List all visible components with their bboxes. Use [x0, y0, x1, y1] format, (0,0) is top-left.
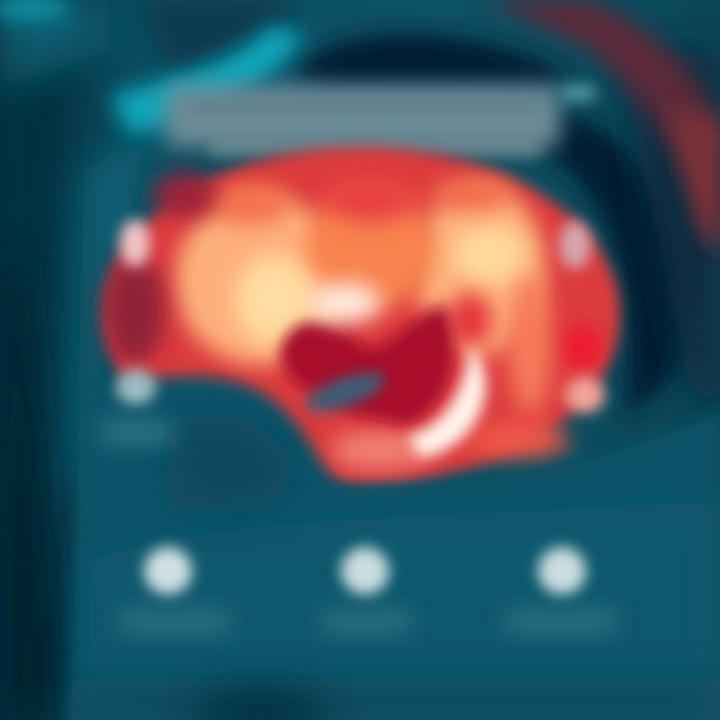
cyan streak — [0, 0, 305, 135]
central crimson heart shape — [280, 283, 486, 458]
marker: upper left item — [100, 369, 172, 444]
top right maroon swirl — [485, 0, 720, 270]
top right dark arch — [295, 34, 720, 420]
marker: bottom item three — [505, 547, 617, 632]
lower wave panel — [70, 376, 720, 720]
central red disc — [104, 147, 620, 483]
background folds — [0, 0, 290, 720]
marker: bottom item two — [322, 547, 412, 632]
marker: bottom item one — [118, 547, 230, 632]
title band — [165, 84, 598, 156]
